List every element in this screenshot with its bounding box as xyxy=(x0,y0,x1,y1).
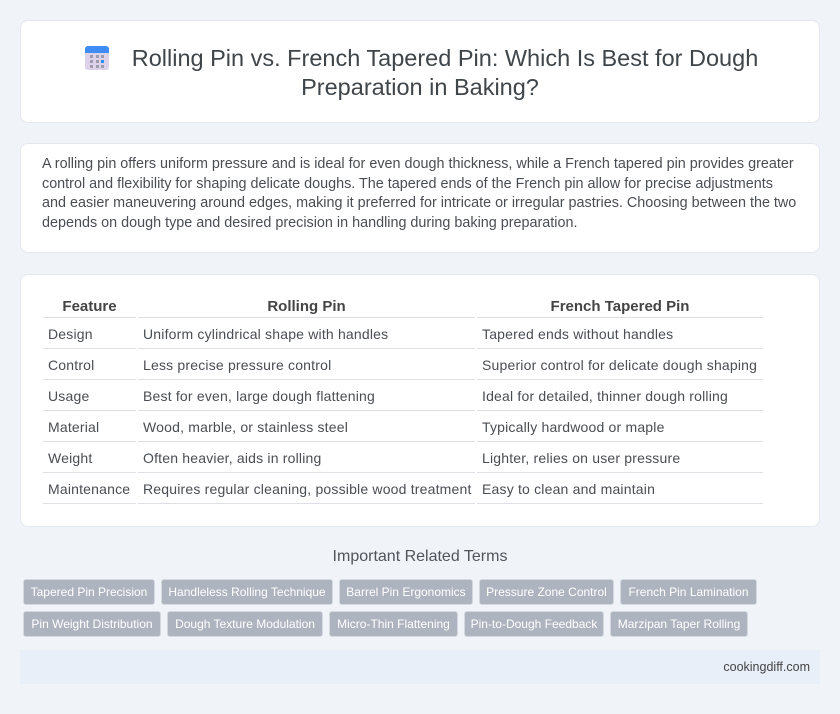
table rows: Ideal for detailed, thinner dough rolling xyxy=(482,388,728,404)
intro text: and easier maneuvering around edges, making it preferred for intricate or irregular pastries. Choosing between the two xyxy=(42,195,796,211)
table rows xyxy=(48,326,757,497)
related term tags: Barrel Pin Ergonomics xyxy=(346,585,466,599)
title: Rolling Pin vs. French Tapered Pin: Which Is Best for Dough xyxy=(132,45,758,71)
related term tags xyxy=(23,579,757,637)
title xyxy=(132,45,758,100)
related term tags: Dough Texture Modulation xyxy=(175,617,315,631)
intro text: A rolling pin offers uniform pressure and is ideal for even dough thickness, while a French tapered pin provides greater xyxy=(42,156,794,172)
related term tags: Marzipan Taper Rolling xyxy=(618,617,740,631)
table rows: Typically hardwood or maple xyxy=(482,419,665,435)
icon: calendar xyxy=(85,46,109,70)
table rows: Often heavier, aids in rolling xyxy=(143,450,321,466)
intro text xyxy=(42,156,796,231)
table rows: Uniform cylindrical shape with handles xyxy=(143,326,388,342)
table rows: Usage xyxy=(48,388,89,404)
comparison table xyxy=(43,298,763,504)
table rows: Lighter, relies on user pressure xyxy=(482,450,680,466)
table rows: Superior control for delicate dough shaping xyxy=(482,357,757,373)
table rows: Design xyxy=(48,326,93,342)
table rows: Weight xyxy=(48,450,92,466)
panel: header xyxy=(20,20,820,123)
table rows: Tapered ends without handles xyxy=(482,326,673,342)
related term tags: Handleless Rolling Technique xyxy=(168,585,326,599)
table rows: Best for even, large dough flattening xyxy=(143,388,375,404)
table rows: Material xyxy=(48,419,99,435)
comparison table: Rolling Pin xyxy=(267,298,346,315)
intro text: depends on dough type and desired precision in handling during baking preparation. xyxy=(42,215,577,231)
table rows: Control xyxy=(48,357,94,373)
table rows: Maintenance xyxy=(48,481,130,497)
related term tags: Micro-Thin Flattening xyxy=(337,617,450,631)
table rows: Requires regular cleaning, possible wood treatment xyxy=(143,481,472,497)
footer source: cookingdiff.com xyxy=(723,660,810,674)
table rows: Wood, marble, or stainless steel xyxy=(143,419,348,435)
footer xyxy=(20,650,820,684)
related term tags: Pin-to-Dough Feedback xyxy=(471,617,597,631)
intro text: control and flexibility for shaping delicate doughs. The tapered ends of the French pin allow for precise adjustments xyxy=(42,176,773,192)
table rows: Easy to clean and maintain xyxy=(482,481,655,497)
title: Preparation in Baking? xyxy=(301,74,539,100)
panel: comparison table xyxy=(20,274,820,527)
table header: Feature xyxy=(62,298,117,315)
related term tags: Pin Weight Distribution xyxy=(31,617,153,631)
related term tags: Pressure Zone Control xyxy=(486,585,607,599)
related term tags: Tapered Pin Precision xyxy=(31,585,147,599)
related term tags: French Pin Lamination xyxy=(628,585,749,599)
comparison table: French Tapered Pin xyxy=(551,298,689,315)
table rows: Less precise pressure control xyxy=(143,357,331,373)
heading: related terms: Important Related Terms xyxy=(333,548,507,565)
panel: introduction xyxy=(20,143,820,253)
